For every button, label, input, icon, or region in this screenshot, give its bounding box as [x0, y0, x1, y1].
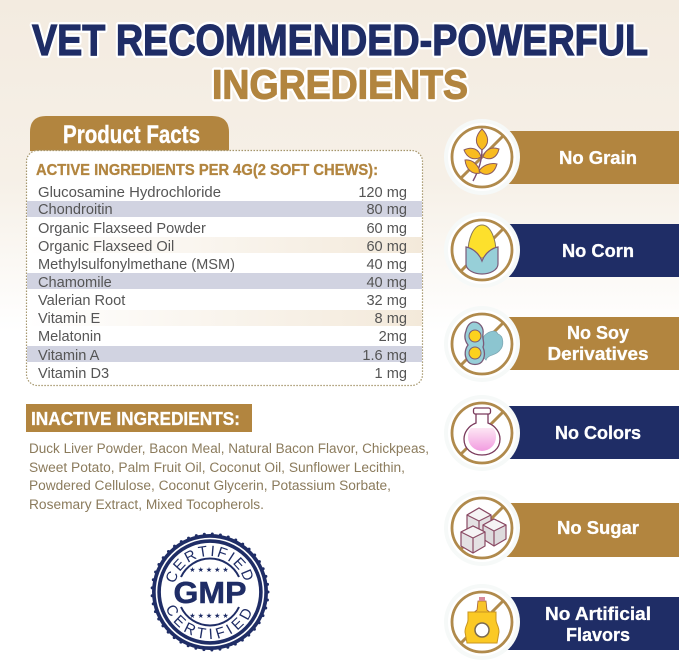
- ingredient rows: Vitamin E: [38, 311, 100, 327]
- product facts tab: Product Facts: [63, 121, 200, 149]
- banner: no soy: [500, 317, 679, 370]
- ingredient rows: 60 mg: [366, 239, 407, 255]
- banner: no sugar: [500, 503, 679, 557]
- title: INGREDIENTS: [212, 62, 468, 108]
- panel: no soy: [444, 306, 679, 382]
- active ingredients heading: ACTIVE INGREDIENTS PER 4G(2 SOFT CHEWS):: [36, 162, 378, 179]
- banner: no sugar: No Sugar: [557, 518, 639, 538]
- ingredient rows: [38, 185, 407, 382]
- ingredient rows: 1 mg: [375, 366, 407, 382]
- inactive list: Powdered Cellulose, Coconut Glycerin, Potassium Sorbate,: [29, 478, 391, 493]
- ingredient rows: 8 mg: [375, 311, 407, 327]
- banner: no artificial flavors: [500, 597, 679, 650]
- banner: no colors: [500, 406, 679, 459]
- ingredient rows: Vitamin A: [38, 348, 100, 364]
- ingredient rows: 2mg: [379, 329, 407, 345]
- title: INGREDIENTS: [212, 62, 468, 108]
- inactive list: Rosemary Extract, Mixed Tocopherols.: [29, 497, 264, 512]
- icon: GMP seal: CERTIFIED: [166, 546, 253, 582]
- banner: no corn: No Corn: [562, 241, 634, 261]
- inactive list: Duck Liver Powder, Bacon Meal, Natural Bacon Flavor, Chickpeas,: [29, 441, 429, 456]
- ingredient rows: Glucosamine Hydrochloride: [38, 185, 221, 201]
- banner: no colors: No Colors: [555, 423, 641, 443]
- ingredient rows: Organic Flaxseed Oil: [38, 239, 174, 255]
- ingredient rows: 32 mg: [366, 293, 407, 309]
- panel: no colors: [444, 395, 679, 471]
- banner: no soy: Derivatives: [548, 344, 648, 364]
- panel: no corn: [444, 212, 679, 288]
- banner: no grain: No Grain: [559, 148, 637, 168]
- ingredient rows: 40 mg: [366, 257, 407, 273]
- banner: no artificial flavors: Flavors: [566, 625, 630, 645]
- ingredient rows: Chamomile: [38, 275, 112, 291]
- icon: GMP seal: ★★★★★: [189, 566, 231, 574]
- title: [32, 17, 648, 108]
- ingredient rows: 60 mg: [366, 221, 407, 237]
- inactive list: Sweet Potato, Palm Fruit Oil, Coconut Oil, Sunflower Lecithin,: [29, 460, 405, 475]
- panel: product facts: [26, 116, 422, 386]
- icon: sugar cubes: [444, 490, 520, 566]
- panel: inactive ingredients: [26, 404, 429, 512]
- icon: corn: [444, 212, 520, 288]
- icon: GMP seal: CERTIFIED: [167, 605, 251, 639]
- product facts tab: [30, 116, 229, 151]
- ingredient rows: Organic Flaxseed Powder: [38, 221, 206, 237]
- inactive heading: [26, 404, 252, 432]
- ingredient rows: 80 mg: [366, 202, 407, 218]
- dotted table panel: [26, 150, 422, 386]
- banner: no artificial flavors: No Artificial: [545, 604, 651, 624]
- ingredient rows: Vitamin D3: [38, 366, 109, 382]
- icon: GMP seal: GMP: [174, 575, 246, 610]
- ingredient rows: Methylsulfonylmethane (MSM): [38, 257, 235, 273]
- icon: soy: [444, 306, 520, 382]
- ingredient rows: 40 mg: [366, 275, 407, 291]
- icon: flask: [444, 395, 520, 471]
- panel: no grain: [444, 119, 679, 195]
- icon: flavor bottle: [444, 584, 520, 660]
- ingredient rows: 120 mg: [358, 185, 407, 201]
- panel: no sugar: [444, 490, 679, 566]
- banner: no grain: [500, 131, 679, 184]
- icon: GMP seal: ★★★★★: [189, 612, 231, 620]
- inactive heading: INACTIVE INGREDIENTS:: [31, 409, 240, 429]
- panel: no artificial flavors: [444, 584, 679, 660]
- inactive list: [29, 441, 429, 512]
- banner: no corn: [500, 224, 679, 277]
- ingredient rows: Chondroitin: [38, 202, 113, 218]
- icon: GMP seal: [150, 532, 270, 652]
- ingredient rows: Valerian Root: [38, 293, 125, 309]
- ingredient rows: Melatonin: [38, 329, 101, 345]
- ingredient rows: 1.6 mg: [362, 348, 407, 364]
- row bands: [27, 201, 422, 362]
- icon: grain: [444, 119, 520, 195]
- banner: no soy: No Soy: [567, 323, 629, 343]
